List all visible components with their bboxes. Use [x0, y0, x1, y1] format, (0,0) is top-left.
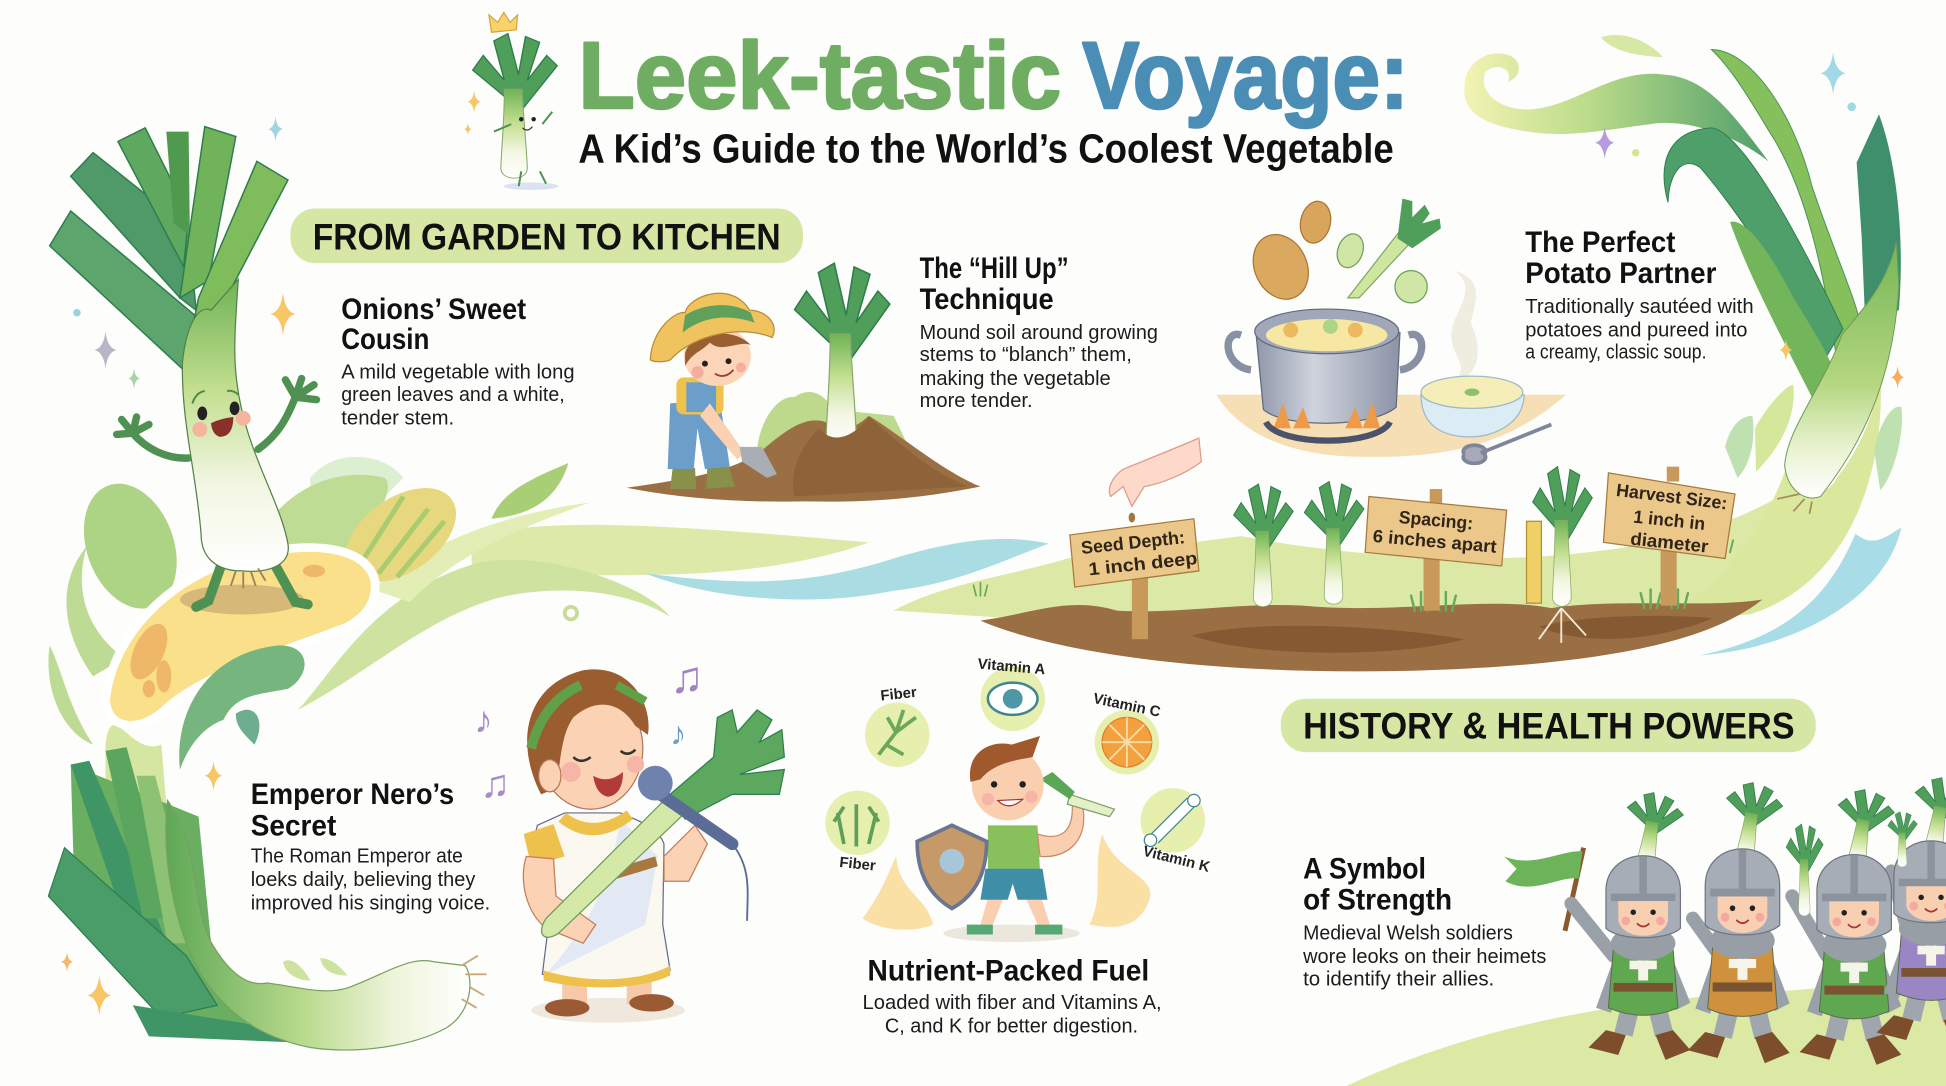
potatoes — [1243, 225, 1319, 308]
mascot arms — [117, 379, 316, 458]
text block: a symbol of strength: to identify their allies. — [1303, 967, 1494, 990]
curled leaf — [1664, 128, 1843, 360]
text block: a symbol of strength: wore leoks on their heimets — [1302, 945, 1546, 968]
mascot face — [192, 391, 251, 437]
flag — [1504, 848, 1584, 931]
text block: nutrient-packed fuel: Loaded with fiber and Vitamins A, — [863, 991, 1162, 1014]
text block: the perfect potato partner: The Perfect — [1525, 226, 1676, 259]
title line one blue word: Voyage: — [1082, 23, 1409, 128]
mascot roots — [231, 568, 266, 588]
microphone — [638, 766, 748, 921]
text block: onions' sweet cousin: A mild vegetable with long — [341, 361, 575, 384]
text block: the perfect potato partner: potatoes and pureed into — [1525, 318, 1747, 341]
text block: the perfect potato partner: Potato Partner — [1525, 257, 1717, 290]
burner — [1266, 402, 1390, 441]
top right big leek with swirl — [1464, 35, 1901, 514]
title line one: Leek-tastic — [578, 23, 1061, 128]
table strip — [1216, 395, 1566, 457]
mascot: giant smiling leek — [50, 127, 316, 607]
spoon — [1463, 424, 1551, 463]
head — [970, 736, 1044, 820]
text block: onions' sweet cousin: Onions’ Sweet — [341, 293, 526, 326]
subtitle: A Kid’s Guide to the World’s Coolest Vegetable — [578, 126, 1394, 172]
section heading: from garden to kitchen: FROM GARDEN TO KITCHEN — [313, 215, 781, 257]
swirl ribbon — [1464, 53, 1769, 161]
text block: nutrient-packed fuel — [863, 954, 1162, 1038]
child hat — [650, 293, 774, 362]
flames — [863, 834, 1150, 930]
ruler and harvest leek — [1527, 467, 1592, 643]
toga — [524, 810, 670, 987]
text block: emperor nero's secret: improved his singing voice. — [251, 892, 490, 915]
sign: spacing: 6 inches apart — [1372, 526, 1497, 557]
knight three — [1800, 785, 1901, 1065]
held leek — [542, 710, 784, 937]
soup bowl — [1421, 376, 1524, 437]
text block: onions' sweet cousin: tender stem. — [341, 406, 454, 429]
mascot stem — [182, 279, 288, 571]
text block: a symbol of strength: A Symbol — [1303, 853, 1426, 886]
illustration: nutrient wheel with strong child — [825, 657, 1212, 942]
raised knight arms — [1571, 871, 1911, 956]
music notes: ♪ — [474, 698, 493, 740]
mascot leaves — [50, 211, 195, 372]
child — [650, 293, 777, 489]
text block: a symbol of strength: of Strength — [1303, 884, 1452, 917]
mascot legs — [196, 566, 308, 607]
illustration: marching knights — [1504, 774, 1946, 1065]
nutrient: vitamin K: Vitamin K — [1141, 844, 1212, 876]
text block: the hill up technique: more tender. — [920, 389, 1033, 412]
music notes: ♫ — [480, 762, 510, 806]
text block: nutrient-packed fuel: C, and K for better digestion. — [885, 1015, 1138, 1038]
title — [578, 23, 1409, 172]
text block: nutrient-packed fuel: Nutrient-Packed Fuel — [868, 954, 1149, 987]
bottom left giant leek lying down — [48, 747, 486, 1050]
text block: emperor nero's secret — [251, 778, 490, 915]
extra handheld leeks — [1786, 812, 1917, 916]
pot — [1228, 309, 1422, 423]
bottom left swirl leaves — [179, 645, 305, 769]
sign: spacing: Spacing: — [1398, 507, 1474, 533]
ground shadow — [943, 925, 1080, 942]
text block: the perfect potato partner: a creamy, classic soup. — [1525, 341, 1706, 364]
hills and leaves behind the mascot — [67, 457, 568, 622]
text block: emperor nero's secret: loeks daily, believing they — [251, 868, 476, 891]
child shirt — [676, 377, 724, 415]
legs — [980, 894, 1050, 925]
sign: seed depth: 1 inch deep — [1088, 548, 1198, 579]
text block: the hill up technique: Technique — [920, 283, 1054, 316]
child boots — [670, 465, 735, 489]
sign: seed depth — [1070, 519, 1199, 639]
background flowing landscape — [48, 372, 1902, 819]
stem and bulb — [1785, 242, 1899, 498]
long arched leaf — [1711, 50, 1862, 360]
legs and sandals — [545, 969, 674, 1016]
shield — [917, 825, 987, 908]
arms — [523, 856, 596, 943]
head — [527, 669, 649, 809]
soil mound — [627, 416, 980, 502]
text block: the perfect potato partner: Traditionally sautéed with — [1525, 295, 1754, 318]
sign: harvest size: Harvest Size: — [1615, 480, 1729, 513]
text block: a symbol of strength: Medieval Welsh soldiers — [1303, 922, 1513, 945]
text block: onions' sweet cousin: Cousin — [341, 323, 429, 356]
sign: harvest size: diameter — [1629, 529, 1709, 557]
knight one — [1589, 789, 1690, 1060]
illustration: emperor Nero singing — [474, 654, 784, 1023]
music notes: ♪ — [670, 716, 686, 752]
nutrient: fiber top: Fiber — [880, 685, 918, 705]
steam — [1451, 271, 1478, 385]
music notes — [474, 654, 704, 806]
nutrient: vitamin A: Vitamin A — [977, 657, 1046, 678]
nutrient: fiber lower — [825, 791, 890, 875]
drifting leaf — [1601, 35, 1663, 57]
text block: a symbol of strength — [1302, 853, 1546, 990]
music notes: ♫ — [670, 654, 704, 703]
yellow potato path — [105, 548, 375, 725]
child head — [684, 326, 751, 386]
roots — [1777, 494, 1812, 514]
flying leek — [1333, 199, 1441, 303]
leek in mound — [795, 263, 890, 447]
section heading: history and health powers: HISTORY & HEALTH POWERS — [1303, 704, 1795, 746]
text block: the hill up technique: Mound soil around growing — [920, 321, 1158, 344]
grassy hill under knights — [1347, 974, 1946, 1086]
garden row soil — [973, 537, 1762, 671]
sign: seed depth: Seed Depth: — [1080, 527, 1186, 558]
garden leeks — [1234, 482, 1364, 607]
knight two — [1688, 778, 1790, 1063]
bush — [757, 392, 916, 462]
nutrient: vitamin A — [977, 657, 1046, 731]
nutrient: vitamin K — [1141, 788, 1212, 876]
text block: emperor nero's secret: Secret — [251, 809, 336, 842]
text block: onions' sweet cousin — [341, 293, 575, 429]
child overalls — [668, 400, 730, 469]
nutrient: fiber top — [865, 685, 930, 767]
nutrient: fiber lower: Fiber — [839, 855, 877, 875]
text block: emperor nero's secret: The Roman Emperor ate — [251, 845, 463, 868]
nutrient: vitamin C — [1092, 691, 1162, 774]
nutrient: vitamin C: Vitamin C — [1092, 691, 1162, 721]
sign: spacing — [1365, 489, 1507, 611]
text block: the hill up technique: The “Hill Up” — [920, 252, 1069, 285]
icon: small crowned leek mascot — [473, 12, 558, 190]
sign: harvest size: 1 inch in — [1633, 507, 1706, 534]
middle leaf — [1730, 222, 1839, 422]
text block: the hill up technique — [920, 252, 1158, 412]
tall dark leaf — [1857, 114, 1901, 325]
sign: harvest size — [1603, 467, 1735, 606]
knight four — [1876, 774, 1946, 1045]
arm with leek — [1038, 772, 1114, 857]
illustration: child hilling soil around leek — [627, 263, 980, 502]
child arm and shovel — [700, 403, 745, 459]
text block: emperor nero's secret: Emperor Nero’s — [251, 778, 454, 811]
body — [988, 825, 1040, 871]
illustration: soup pot with potatoes and leek — [1216, 198, 1566, 463]
text block: onions' sweet cousin: green leaves and a white, — [341, 383, 565, 406]
text block: the perfect potato partner — [1525, 226, 1754, 364]
text block: the hill up technique: making the vegetable — [920, 367, 1111, 390]
text block: the hill up technique: stems to “blanch” them, — [920, 343, 1132, 366]
ground shadow — [531, 998, 685, 1023]
illustration: hand dropping seed — [1109, 438, 1201, 523]
